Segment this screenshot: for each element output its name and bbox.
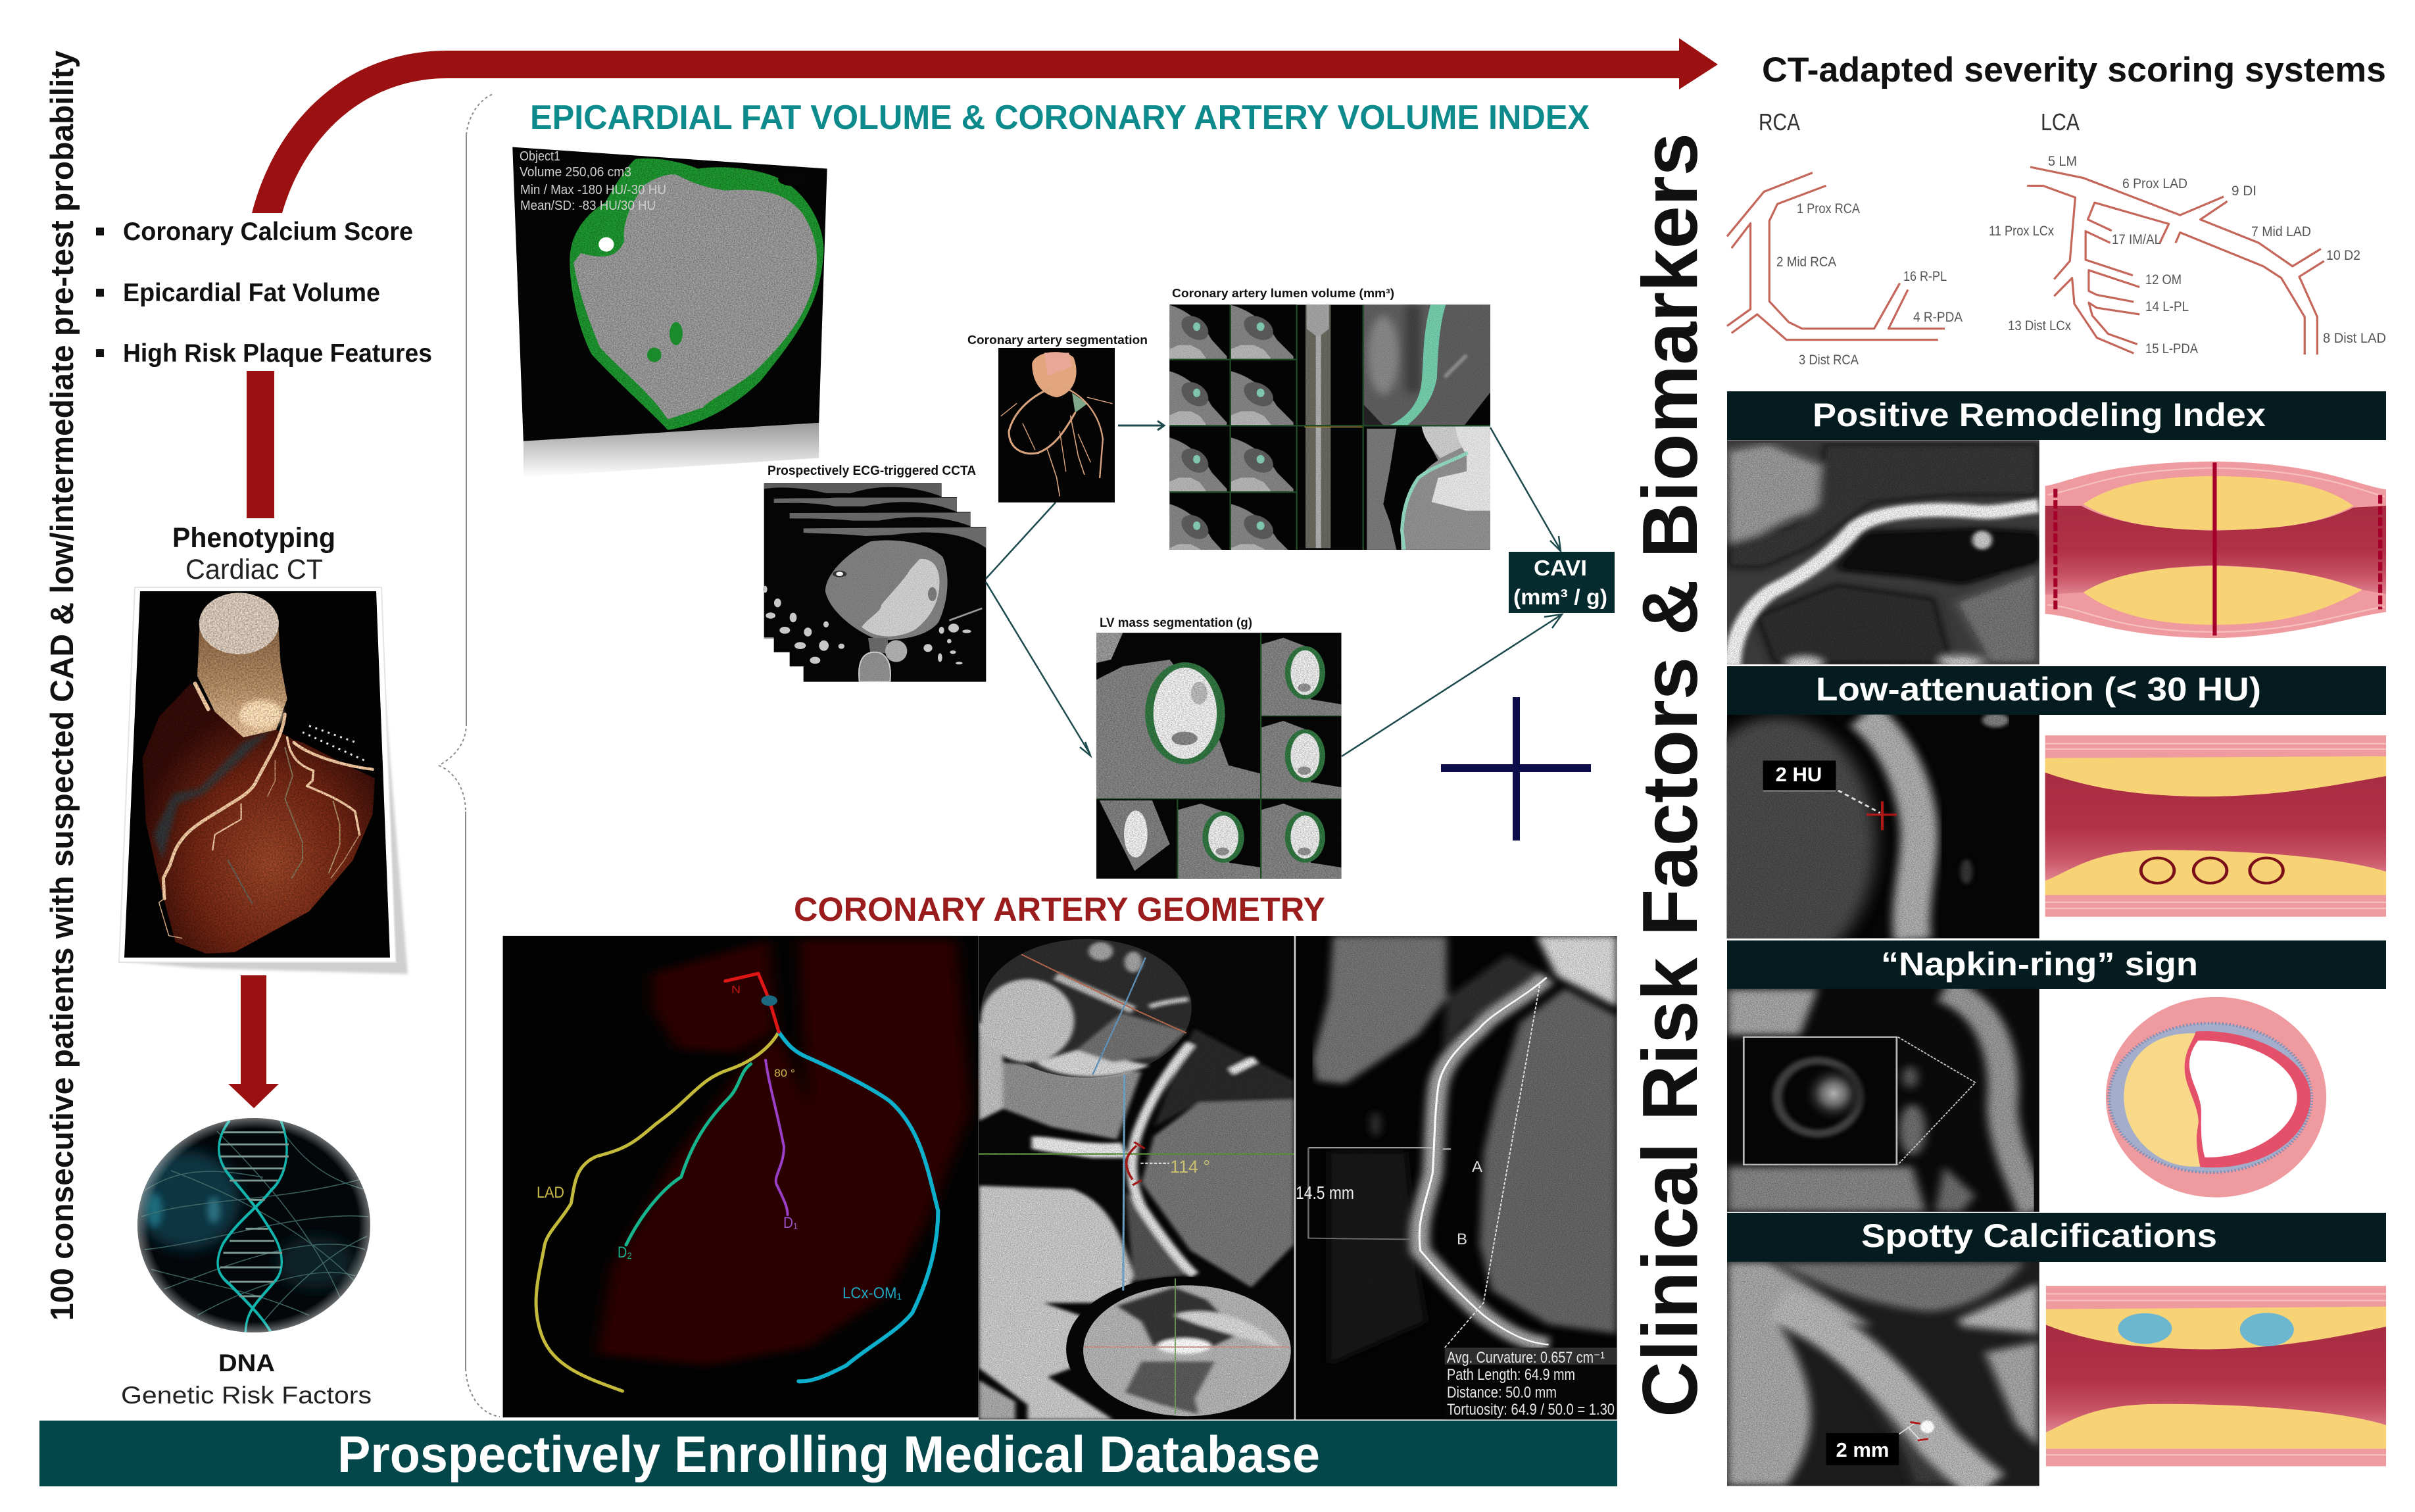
panel: bifurcation angle CT bbox=[979, 936, 1294, 1422]
readout: fat volume measurements: Object1 bbox=[520, 149, 560, 164]
header bar: “Napkin-ring” sign bbox=[1881, 946, 2198, 983]
subheading: cardiac CT: Cardiac CT bbox=[185, 554, 323, 585]
list: phenotyping bullets bbox=[96, 218, 432, 368]
labels: vessel names: LCx-OM₁ bbox=[842, 1284, 902, 1302]
vertical text: patient population: 100 consecutive patients with suspected CAD & low/intermediate pre-test probability bbox=[45, 51, 80, 1321]
labels: vessel names: 80 ° bbox=[774, 1068, 795, 1079]
diagram: RCA segments bbox=[1727, 109, 1963, 368]
labels: LCA segments: 9 DI bbox=[2232, 183, 2256, 199]
labels: LCA segments: 5 LM bbox=[2048, 154, 2077, 169]
labels: vessel names: N bbox=[731, 985, 741, 996]
labels: LCA segments: 8 Dist LAD bbox=[2323, 331, 2386, 346]
arrow: segmentation to lumen bbox=[1118, 421, 1164, 430]
title: CT-adapted scoring: CT-adapted severity scoring systems bbox=[1762, 51, 2386, 89]
image: cardiac CT heart render bbox=[119, 587, 408, 974]
vessel: LCx-OM1 bbox=[779, 1032, 938, 1381]
header bar: Low-attenuation (< 30 HU) bbox=[1816, 671, 2261, 708]
inset: lower cross-section bbox=[1066, 1277, 1294, 1422]
label: lumen volume: Coronary artery lumen volume (mm³) bbox=[1172, 287, 1394, 300]
panel: tortuosity CT bbox=[1294, 936, 1617, 1419]
bottom-right curved MPR bbox=[1363, 426, 1490, 550]
label: RCA: RCA bbox=[1759, 109, 1800, 135]
bullet: high risk plaque features: High Risk Plaque Features bbox=[123, 339, 432, 368]
panel: low attenuation bbox=[1678, 666, 2386, 969]
CT cells: cross sections bbox=[1169, 294, 1297, 558]
label: 2 mm: 2 mm bbox=[1836, 1438, 1889, 1461]
footer banner bbox=[39, 1421, 1617, 1486]
header bar bbox=[1727, 666, 2386, 715]
labels: LCA segments bbox=[1989, 154, 2386, 356]
label: LV mass: LV mass segmentation (g) bbox=[1100, 616, 1252, 630]
labels: LCA segments: 14 L-PL bbox=[2145, 299, 2189, 314]
image: stacked CCTA slices bbox=[763, 483, 986, 682]
label: point A: A bbox=[1472, 1158, 1482, 1176]
CT image bbox=[1727, 440, 2039, 671]
labels: RCA segments: 2 Mid RCA bbox=[1776, 255, 1836, 270]
readout: fat volume measurements: Volume 250,06 cm3 bbox=[520, 165, 631, 180]
readout: fat volume measurements bbox=[520, 149, 666, 213]
labels: vessel names: D₁ bbox=[783, 1214, 798, 1232]
icon: plus sign bbox=[1441, 697, 1591, 841]
vertical title: clinical risk factors and biomarkers: Clinical Risk Factors & Biomarkers bbox=[1626, 133, 1714, 1417]
labels: LCA segments: 10 D2 bbox=[2326, 248, 2360, 263]
text: CAVI: CAVI bbox=[1534, 556, 1587, 580]
arrow: curved red arrow to scoring systems bbox=[252, 38, 1718, 213]
panel: spotty calcifications bbox=[1727, 1213, 2386, 1487]
label: angle measurement: 114 ° bbox=[1170, 1157, 1210, 1177]
illustration: artery with remodeling bbox=[2045, 462, 2386, 638]
readout: fat volume measurements: Min / Max -180 HU/-30 HU bbox=[520, 183, 666, 197]
heading: phenotyping: Phenotyping bbox=[172, 522, 335, 554]
header bar: Spotty Calcifications bbox=[1861, 1217, 2217, 1254]
heading: DNA: DNA bbox=[218, 1350, 275, 1377]
title: epicardial fat and CAVI: EPICARDIAL FAT VOLUME & CORONARY ARTERY VOLUME INDEX bbox=[530, 99, 1590, 137]
labels: RCA segments bbox=[1776, 201, 1963, 368]
labels: RCA segments: 16 R-PL bbox=[1903, 269, 1947, 284]
connector: CCTA to segmentation bbox=[986, 502, 1056, 579]
label: 2 HU: 2 HU bbox=[1776, 763, 1822, 786]
readout: tortuosity metrics: Path Length: 64.9 mm bbox=[1447, 1366, 1575, 1384]
panel: coronary tree trace bbox=[503, 936, 979, 1417]
illustration: spotty calcium plaque bbox=[2046, 1286, 2386, 1466]
labels: RCA segments: 3 Dist RCA bbox=[1799, 353, 1859, 368]
label: point B: B bbox=[1457, 1231, 1467, 1248]
image: LV mass segmentation bbox=[1096, 633, 1341, 879]
labels: vessel names bbox=[537, 985, 902, 1302]
arrow: down to DNA bbox=[228, 975, 279, 1108]
arrow: lumen to CAVI bbox=[1490, 427, 1561, 551]
readout: fat volume measurements: Mean/SD: -83 HU/30 HU bbox=[520, 199, 656, 213]
label: LCA: LCA bbox=[2041, 109, 2080, 135]
labels: vessel names: D₂ bbox=[618, 1244, 632, 1261]
header bar bbox=[1727, 940, 2386, 989]
text: banner label: Prospectively Enrolling Medical Database bbox=[337, 1425, 1320, 1483]
title: coronary artery geometry: CORONARY ARTERY GEOMETRY bbox=[794, 890, 1325, 928]
image: epicardial fat CT bbox=[512, 147, 827, 477]
inset: upper cross-section bbox=[981, 939, 1192, 1078]
vessel: D1 bbox=[766, 1060, 788, 1215]
readout: tortuosity metrics: Avg. Curvature: 0.657 cm⁻¹ bbox=[1447, 1349, 1605, 1367]
brace: database grouping bbox=[439, 94, 500, 1417]
box: CAVI bbox=[1509, 552, 1615, 613]
header bar bbox=[1727, 1213, 2386, 1262]
labels: LCA segments: 13 Dist LCx bbox=[2008, 318, 2071, 333]
panel: positive remodeling index bbox=[1727, 391, 2386, 671]
labels: LCA segments: 11 Prox LCx bbox=[1989, 224, 2054, 239]
illustration: low attenuation plaque bbox=[2045, 735, 2386, 917]
readout: tortuosity metrics: Distance: 50.0 mm bbox=[1447, 1384, 1557, 1402]
label: coronary segmentation: Coronary artery segmentation bbox=[967, 333, 1148, 347]
labels: LCA segments: 7 Mid LAD bbox=[2251, 224, 2311, 239]
labels: LCA segments: 17 IM/AL bbox=[2112, 232, 2161, 247]
bullet: epicardial fat volume: Epicardial Fat Volume bbox=[123, 279, 380, 307]
readout: tortuosity metrics bbox=[1447, 1349, 1615, 1419]
arrow: CCTA to LV mass bbox=[986, 582, 1090, 756]
labels: LCA segments: 12 OM bbox=[2145, 272, 2182, 287]
illustration: napkin ring cross-section bbox=[2106, 997, 2326, 1198]
labels: RCA segments: 4 R-PDA bbox=[1913, 310, 1963, 325]
labels: RCA segments: 1 Prox RCA bbox=[1797, 201, 1860, 216]
header bar bbox=[1727, 391, 2386, 440]
readout: tortuosity metrics: Tortuosity: 64.9 / 50.0 = 1.30 bbox=[1447, 1401, 1615, 1419]
labels: vessel names: LAD bbox=[537, 1184, 564, 1202]
subheading: genetic risk factors: Genetic Risk Factors bbox=[121, 1382, 372, 1409]
vessel: left main bbox=[725, 973, 779, 1032]
bullet: coronary calcium score: Coronary Calcium Score bbox=[123, 218, 413, 246]
CT image bbox=[1678, 713, 2039, 969]
vessel: D2 bbox=[626, 1064, 751, 1245]
diagram: LCA segments bbox=[1989, 109, 2386, 356]
header bar: Positive Remodeling Index bbox=[1813, 397, 2266, 433]
label: distance: 14.5 mm bbox=[1296, 1183, 1354, 1203]
labels: LCA segments: 6 Prox LAD bbox=[2122, 176, 2187, 191]
CT image with inset bbox=[1727, 989, 2039, 1212]
vessel: LAD bbox=[536, 1032, 779, 1391]
labels: LCA segments: 15 L-PDA bbox=[2145, 341, 2198, 356]
connector: red bar bbox=[247, 371, 274, 518]
arrow: LV mass to CAVI bbox=[1342, 614, 1562, 756]
CT image bbox=[1727, 1262, 2039, 1487]
image: coronary artery tree bbox=[998, 348, 1115, 502]
image: DNA helix globe bbox=[135, 1118, 370, 1332]
label: CCTA: Prospectively ECG-triggered CCTA bbox=[768, 464, 976, 478]
image: lumen volume CT grid bbox=[1169, 294, 1490, 558]
top-right curved MPR bbox=[1363, 305, 1490, 426]
text: CAVI unit: (mm³ / g) bbox=[1513, 585, 1607, 609]
panel: napkin ring bbox=[1727, 940, 2386, 1212]
